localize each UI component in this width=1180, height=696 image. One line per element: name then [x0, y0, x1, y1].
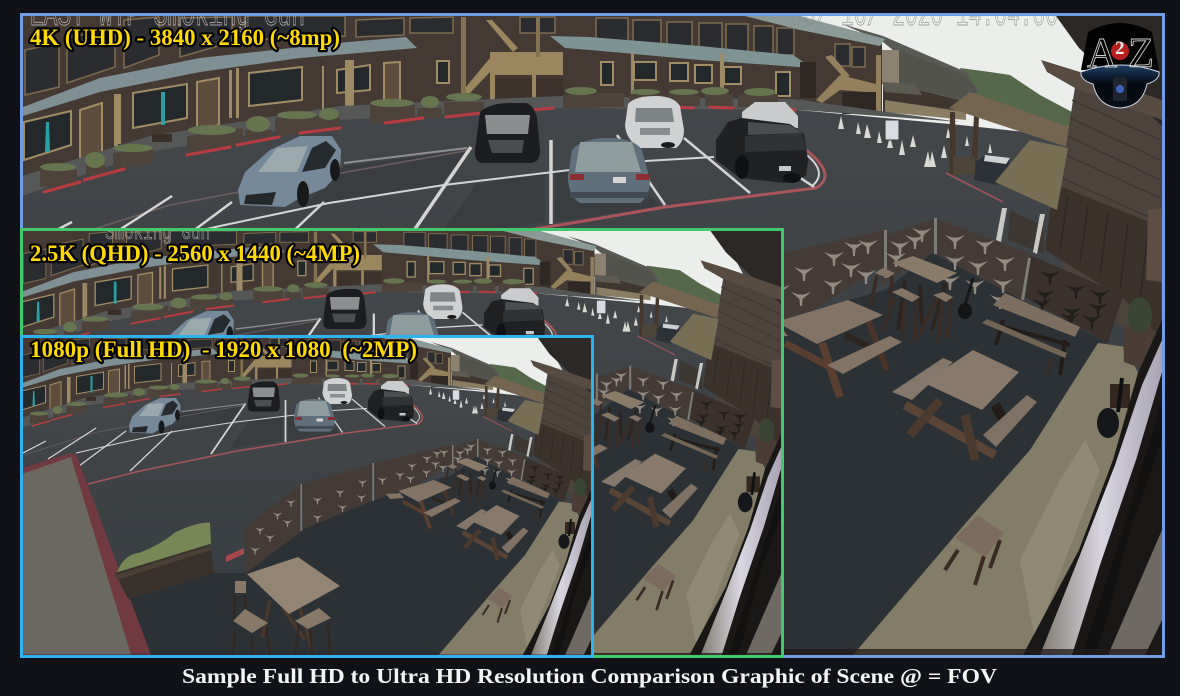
bar table right	[892, 256, 957, 330]
label: 4K: 4K (UHD) - 3840 x 2160 (~8mp)	[30, 25, 340, 50]
far building	[842, 24, 978, 120]
curved metal roof	[23, 37, 417, 116]
car: white sedan in far bay	[625, 96, 684, 148]
painted red lane line	[156, 150, 825, 308]
picnic table center	[892, 350, 1037, 460]
pavilion roof and posts	[949, 92, 1072, 175]
logo: A2Z dome camera: A	[1087, 31, 1118, 77]
traffic cones	[838, 116, 992, 167]
right stairs	[800, 55, 881, 115]
planter with grass	[115, 522, 214, 599]
wall posts	[114, 52, 724, 146]
fence posts	[581, 218, 1031, 402]
window reflection and dark wall	[1023, 320, 1162, 655]
upper floor windows	[25, 16, 865, 95]
sign board	[885, 120, 899, 140]
lot sidewalk	[22, 96, 960, 196]
back wall planks and planter	[1123, 297, 1155, 372]
burned-in camera name, QHD: Smoking Gun	[105, 220, 210, 247]
ground floor windows and doors	[24, 61, 790, 160]
distant trees	[960, 68, 1075, 128]
white parking lines	[26, 135, 819, 282]
border: QHD panel	[22, 230, 782, 656]
planters	[40, 93, 778, 187]
red curbs	[44, 107, 795, 192]
logo: A2Z dome camera	[1081, 23, 1159, 108]
car: white car behind truck	[742, 102, 798, 128]
bottom vignette	[22, 649, 1163, 656]
car: grey-blue hatchback	[238, 136, 341, 207]
car: blue sedan rear	[568, 138, 650, 203]
fence panels	[468, 219, 1123, 486]
patio table by wall	[152, 134, 172, 142]
red curb near pavilion	[946, 173, 1003, 202]
panel: 2.5K QHD scene	[21, 231, 782, 658]
stool on walkway	[945, 515, 1004, 585]
second-wing metal roof	[550, 36, 812, 68]
small pickup under roof	[974, 155, 1010, 185]
longhorn cut-outs	[480, 228, 1015, 449]
teal umbrellas	[45, 92, 165, 152]
sky	[690, 16, 1110, 140]
panel: 1080p Full HD scene	[21, 338, 592, 658]
central stairs	[461, 17, 563, 108]
shingle roof lower left	[23, 453, 151, 655]
planter foliage	[40, 87, 776, 171]
picnic table right	[982, 293, 1080, 375]
bar stools	[870, 275, 951, 343]
barn doors	[80, 62, 400, 168]
car: black pickup	[716, 118, 808, 183]
label: 1080p: 1080p (Full HD) - 1920 x 1080 (~2MP)	[30, 337, 417, 362]
concrete walkway	[853, 343, 1138, 655]
chair and ashtray	[1097, 378, 1130, 438]
big wooden building	[1041, 16, 1162, 430]
patio asphalt	[236, 253, 1108, 655]
bar table front	[474, 454, 660, 640]
label: QHD: 2.5K (QHD) - 2560 x 1440 (~4MP)	[30, 241, 360, 266]
car: black SUV	[475, 103, 540, 163]
red curb stub by fence	[432, 436, 468, 464]
dark paving patches	[300, 150, 660, 238]
picnic table left	[752, 300, 902, 397]
small shingled roof and white posts	[995, 140, 1068, 254]
logo: A2Z dome camera: 2	[1115, 38, 1124, 59]
front stools	[446, 502, 642, 650]
caption: Sample Full HD to Ultra HD Resolution Comparison Graphic of Scene @ = FOV	[182, 664, 997, 688]
border: 1080p panel	[22, 336, 592, 656]
logo: A2Z dome camera: Z	[1128, 31, 1154, 77]
brown trim at right edge	[1146, 208, 1162, 282]
umbrella base	[958, 278, 973, 319]
upper-level metal roofs	[745, 16, 885, 46]
main building wall	[22, 16, 882, 176]
